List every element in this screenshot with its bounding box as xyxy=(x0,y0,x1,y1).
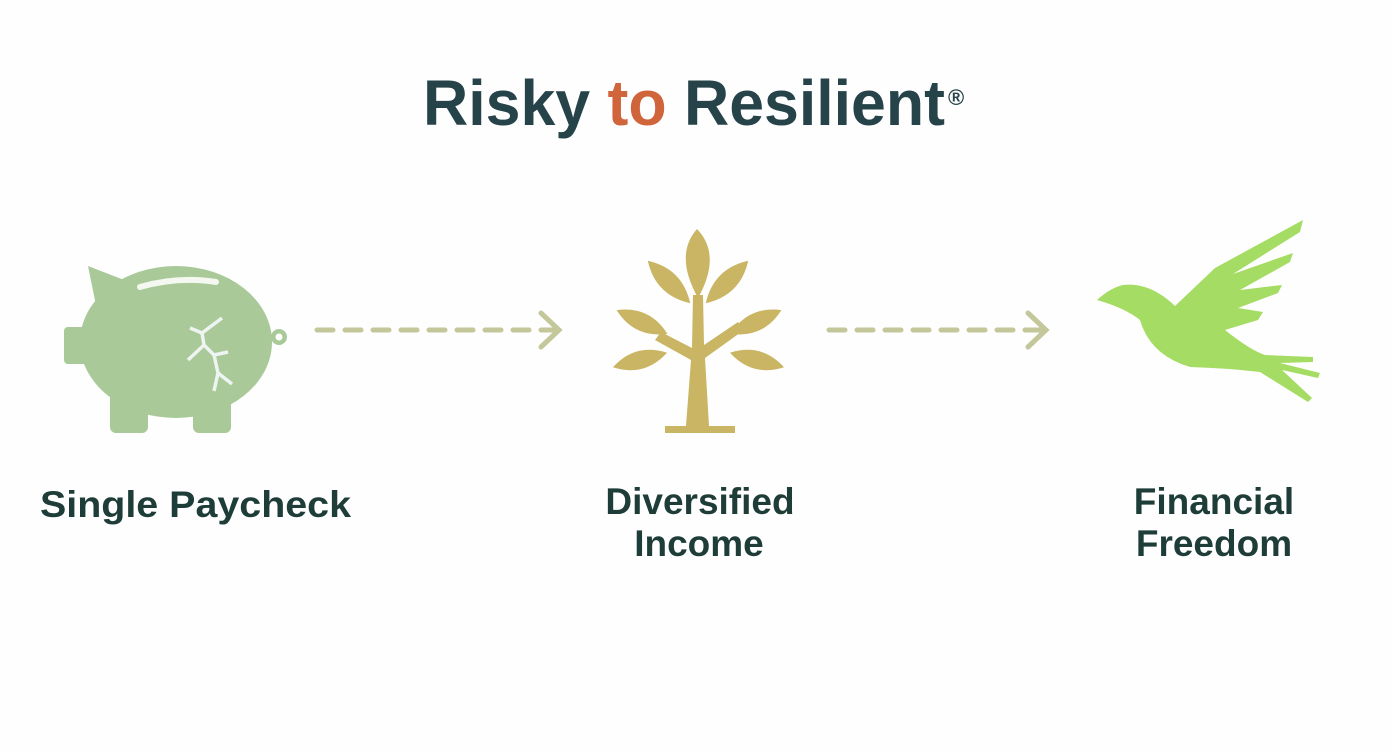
label: diversified income: Diversified xyxy=(605,481,795,522)
title: ® xyxy=(948,85,964,110)
label: diversified income: Income xyxy=(634,523,764,564)
label: financial freedom: Financial xyxy=(1134,481,1294,522)
title: Risky to Resilient xyxy=(423,67,945,139)
arrow 2 xyxy=(829,313,1046,347)
icon: tree xyxy=(611,229,786,433)
arrow 1 xyxy=(317,313,559,347)
icon: bird xyxy=(1097,220,1320,402)
icon: cracked piggy bank xyxy=(64,266,287,433)
label: single paycheck: Single Paycheck xyxy=(40,484,351,525)
label: financial freedom: Freedom xyxy=(1136,523,1292,564)
